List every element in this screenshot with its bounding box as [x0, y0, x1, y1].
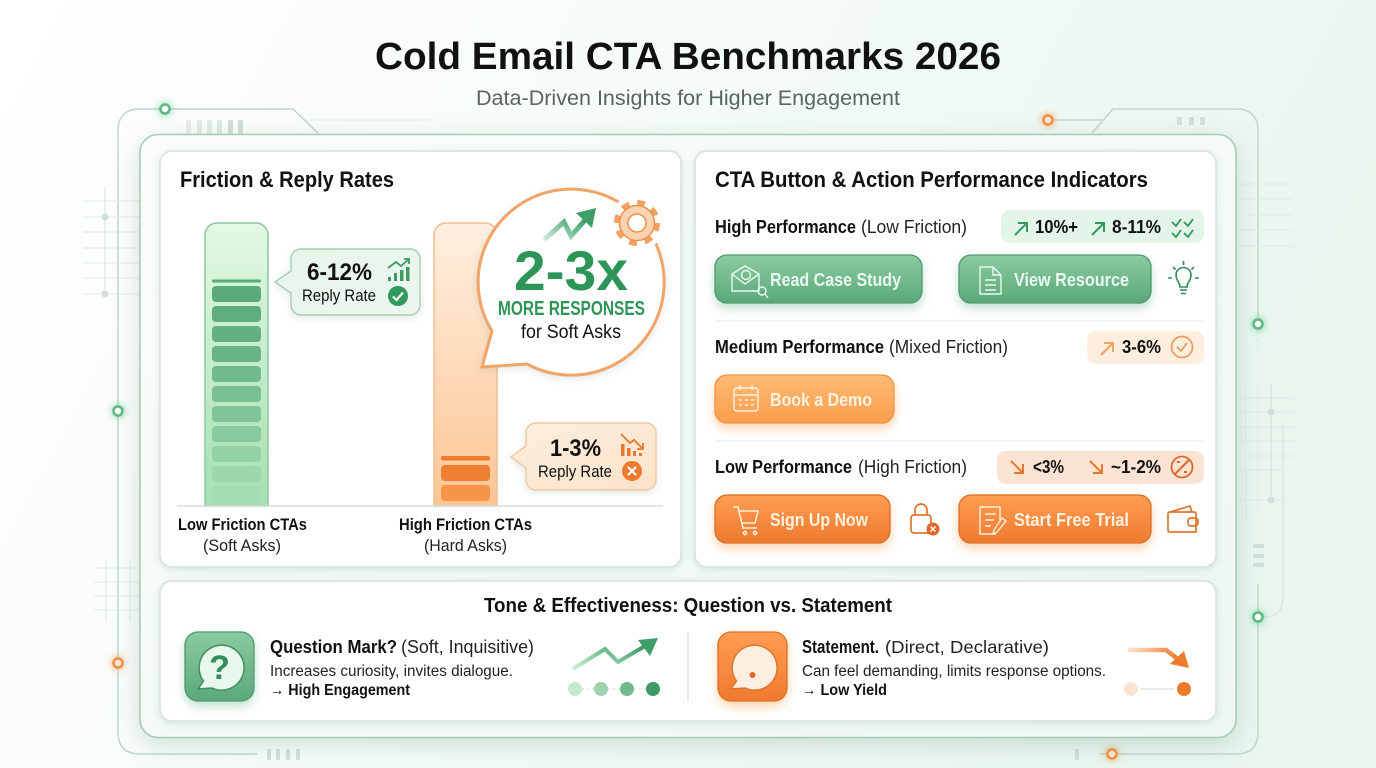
main frame [140, 134, 1236, 738]
text: statement: Can feel demanding, limits response options. [802, 663, 1106, 680]
row label: high performance [715, 217, 967, 237]
icon: trend arrow [544, 208, 596, 240]
text: question mark: Question Mark? [270, 637, 397, 657]
icon: question bubble: ? [209, 649, 230, 687]
row label: low performance [715, 457, 967, 477]
callout: 1-3% reply rate: 1-3% [550, 435, 601, 462]
button: start free trial: Start Free Trial [1014, 510, 1129, 530]
icon: statement bubble [718, 632, 787, 701]
chart: rising trend [568, 638, 660, 696]
icon: check [388, 286, 408, 306]
text: statement: → Low Yield [802, 682, 887, 699]
icon: locked [911, 504, 940, 536]
row label: medium performance: (Mixed Friction) [889, 337, 1008, 357]
pill: medium performance rates [1087, 331, 1204, 364]
icon: wallet [1168, 506, 1198, 532]
button: view resource: View Resource [1014, 270, 1129, 290]
bar: low friction [205, 223, 268, 506]
callout: 2-3x more responses [478, 189, 665, 375]
label: high friction CTAs: High Friction CTAs [399, 516, 532, 534]
text: question mark [270, 637, 534, 699]
pill: high performance rates [1001, 210, 1204, 243]
callout: 1-3% reply rate: Reply Rate [538, 462, 612, 481]
panel: tone and effectiveness [160, 581, 1216, 721]
button: read case study [715, 255, 922, 303]
label: high friction CTAs: (Hard Asks) [424, 537, 507, 555]
row label: high performance: (Low Friction) [861, 217, 967, 237]
pill: low performance rates [997, 451, 1204, 484]
button: read case study: Read Case Study [770, 270, 901, 290]
bar: high friction [434, 223, 497, 506]
callout: 6-12% reply rate: 6-12% [307, 259, 372, 286]
panel: CTA button performance [695, 151, 1216, 567]
label: low friction CTAs [178, 516, 307, 555]
label: low friction CTAs: (Soft Asks) [203, 537, 281, 555]
chart: falling trend [1124, 650, 1191, 696]
icon: calendar [734, 385, 758, 411]
button: start free trial [959, 495, 1151, 543]
label: high friction CTAs [399, 516, 532, 555]
button: view resource [959, 255, 1151, 303]
row label: medium performance: Medium Performance [715, 337, 884, 357]
pill: high performance rates: 8-11% [1112, 217, 1161, 237]
icon: question bubble [185, 632, 254, 701]
row label: medium performance [715, 337, 1008, 357]
callout: 2-3x more responses: for Soft Asks [521, 322, 621, 343]
callout: 6-12% reply rate [275, 249, 420, 315]
heading: tone and effectiveness: Tone & Effectiveness: Question vs. Statement [484, 595, 892, 617]
text: question mark: (Soft, Inquisitive) [401, 637, 534, 657]
pill: low performance rates: <3% [1033, 457, 1064, 477]
callout: 1-3% reply rate [511, 423, 656, 490]
pill: high performance rates: 10%+ [1035, 217, 1078, 237]
text: statement: Statement. [802, 637, 879, 657]
button: book a demo: Book a Demo [770, 390, 872, 410]
button: book a demo [715, 375, 894, 423]
button: sign up now: Sign Up Now [770, 510, 869, 530]
title: Cold Email CTA Benchmarks 2026 [375, 36, 1001, 78]
text: question mark: → High Engagement [270, 682, 410, 699]
subtitle: Data-Driven Insights for Higher Engagement [476, 87, 900, 110]
label: low friction CTAs: Low Friction CTAs [178, 516, 307, 534]
text: question mark: Increases curiosity, invites dialogue. [270, 663, 513, 680]
pill: medium performance rates: 3-6% [1122, 337, 1161, 357]
callout: 2-3x more responses: MORE RESPONSES [498, 298, 645, 320]
icon: cross [622, 461, 642, 481]
pill: low performance rates: ~1-2% [1111, 457, 1161, 477]
callout: 6-12% reply rate: Reply Rate [302, 286, 376, 305]
row label: high performance: High Performance [715, 217, 856, 237]
icon: form [980, 507, 1006, 534]
text: statement: (Direct, Declarative) [885, 637, 1049, 657]
icon: cart [733, 507, 758, 535]
panel: friction and reply rates [160, 151, 681, 567]
icon: gear [609, 195, 665, 251]
icon: lightbulb [1168, 261, 1199, 294]
heading: CTA performance: CTA Button & Action Performance Indicators [715, 167, 1148, 192]
glowing node markers [114, 104, 1262, 758]
icon: envelope search [732, 266, 768, 298]
row label: low performance: Low Performance [715, 457, 852, 477]
callout: 2-3x more responses: 2-3x [514, 239, 628, 302]
row label: low performance: (High Friction) [858, 457, 967, 477]
icon: rising chart [388, 259, 410, 281]
icon: document [980, 267, 1001, 294]
heading: friction and reply rates: Friction & Reply Rates [180, 167, 394, 192]
icon: falling chart [621, 434, 643, 456]
text: statement [802, 637, 1106, 699]
button: sign up now [715, 495, 890, 543]
